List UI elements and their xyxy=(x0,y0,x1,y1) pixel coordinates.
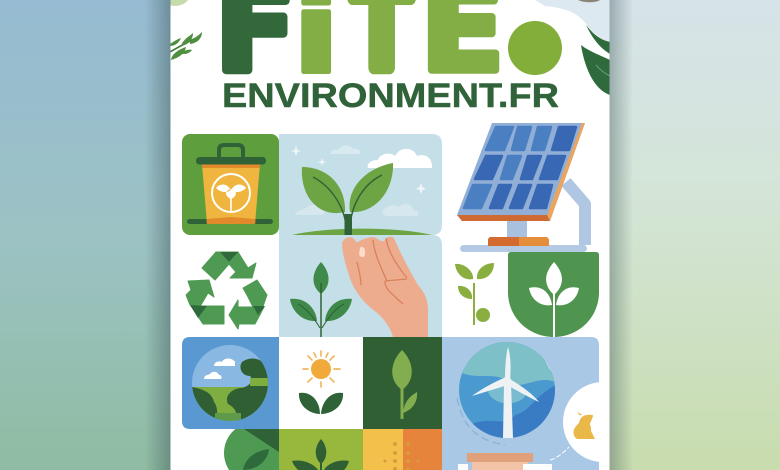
background: blurred gradient left xyxy=(0,0,171,470)
icon: leaf xyxy=(392,350,417,419)
icon: solar panel xyxy=(457,123,587,252)
panel: hand and plant xyxy=(279,235,442,337)
panel: dark leaf tile xyxy=(363,337,442,429)
icon: bin handle xyxy=(219,145,243,158)
title: FITE. xyxy=(222,0,562,75)
icon: ground line xyxy=(187,219,273,224)
panel: lime plant tile xyxy=(279,429,363,470)
panel: earth tile xyxy=(182,337,279,429)
top right sky and cloud decoration xyxy=(535,0,610,45)
poster content xyxy=(170,0,643,470)
icon: wind turbine xyxy=(472,347,539,438)
panel: seedling sky xyxy=(279,134,442,235)
icon: seedling xyxy=(302,163,393,235)
subtitle: ENVIRONMENT.FR: ENVIRONMENT.FR xyxy=(222,77,559,115)
icon: earth globe xyxy=(192,345,268,421)
icon: dots xyxy=(384,442,420,470)
icon: dashed connector xyxy=(550,447,569,460)
icon: green sprig xyxy=(170,32,202,60)
icon: sun xyxy=(303,351,340,387)
panel: green shield xyxy=(508,252,599,337)
icon: faint cloud xyxy=(330,145,360,154)
icon: dark plant xyxy=(292,439,349,470)
icon: ground xyxy=(292,229,432,235)
panel: sun tile xyxy=(298,350,344,414)
icon: solar cells xyxy=(464,127,576,208)
icon: white circle badge xyxy=(563,382,643,462)
poster sheet xyxy=(170,0,610,470)
panel: yellow orange tile xyxy=(363,429,442,470)
icon: right leaves xyxy=(581,25,610,95)
icon: dashed orbit xyxy=(457,398,505,445)
icon: bin shadow details xyxy=(202,164,260,224)
icon: building xyxy=(458,453,552,470)
icon: white cloud xyxy=(368,149,432,168)
icon: leaves xyxy=(299,393,343,414)
icon: yellow apple xyxy=(574,411,595,439)
icon: faint lower clouds xyxy=(295,204,419,216)
icon: solar foot xyxy=(460,245,587,252)
icon: small sprout xyxy=(455,263,494,325)
title dot xyxy=(508,21,562,75)
icon: sparkles xyxy=(291,146,426,194)
icon: green circle cut by tiles xyxy=(224,422,286,470)
icon: solar post xyxy=(507,221,527,237)
top left leaf xyxy=(170,0,188,6)
background: blurred gradient right xyxy=(609,0,780,470)
icon: solar arm xyxy=(566,182,585,245)
icon: bin lid xyxy=(196,157,266,164)
icon: recycling arrows xyxy=(186,252,267,329)
panel: recycling bin xyxy=(182,134,279,235)
icon: globe xyxy=(455,340,560,440)
panel: wind turbine tile xyxy=(442,337,643,470)
icon: plant with three leaves xyxy=(290,262,352,337)
icon: hand xyxy=(342,237,428,337)
icon: bin emblem xyxy=(212,174,250,212)
icon: white plant xyxy=(529,262,579,337)
icon: bin body xyxy=(202,164,260,224)
icon: solar frame xyxy=(457,123,585,221)
icon: solar base xyxy=(488,237,549,246)
